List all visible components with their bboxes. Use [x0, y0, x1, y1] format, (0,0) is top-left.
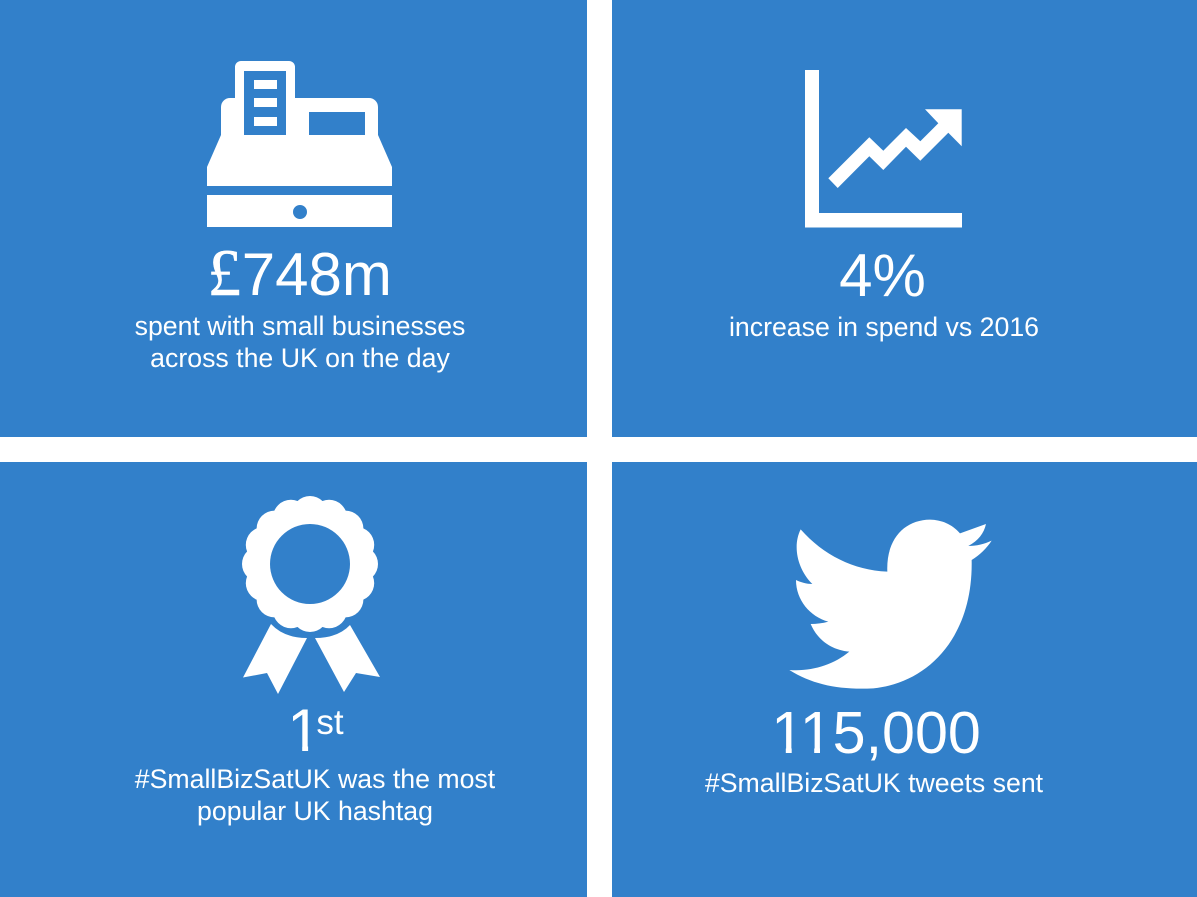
panel: hashtag	[0, 462, 587, 897]
icon: cash register	[207, 61, 392, 227]
stat: 4%: 4%	[839, 242, 926, 309]
stat: 1st: 1	[287, 697, 321, 764]
panel: tweets	[612, 462, 1197, 897]
stat: £748m: £	[208, 236, 241, 310]
text: spend description	[135, 311, 465, 373]
text: hashtag description	[135, 764, 496, 826]
stat: 1st: st	[316, 703, 344, 742]
text: growth description: increase in spend vs 2016	[729, 312, 1039, 342]
text: hashtag description: #SmallBizSatUK was the most	[135, 764, 496, 794]
panel: growth	[612, 0, 1197, 437]
text: tweets description: #SmallBizSatUK tweets sent	[705, 768, 1044, 798]
stat: £748m: 748m	[242, 241, 392, 308]
stat: 1st	[287, 697, 344, 764]
icon: rising chart	[805, 70, 962, 228]
stat: 115,000: 115,000	[771, 699, 981, 766]
panel: spend	[0, 0, 587, 437]
icon: rosette	[242, 496, 380, 694]
text: spend description: across the UK on the day	[150, 343, 450, 373]
text: hashtag description: popular UK hashtag	[197, 796, 433, 826]
text: spend description: spent with small businesses	[135, 311, 465, 341]
icon: twitter bird	[789, 520, 992, 689]
